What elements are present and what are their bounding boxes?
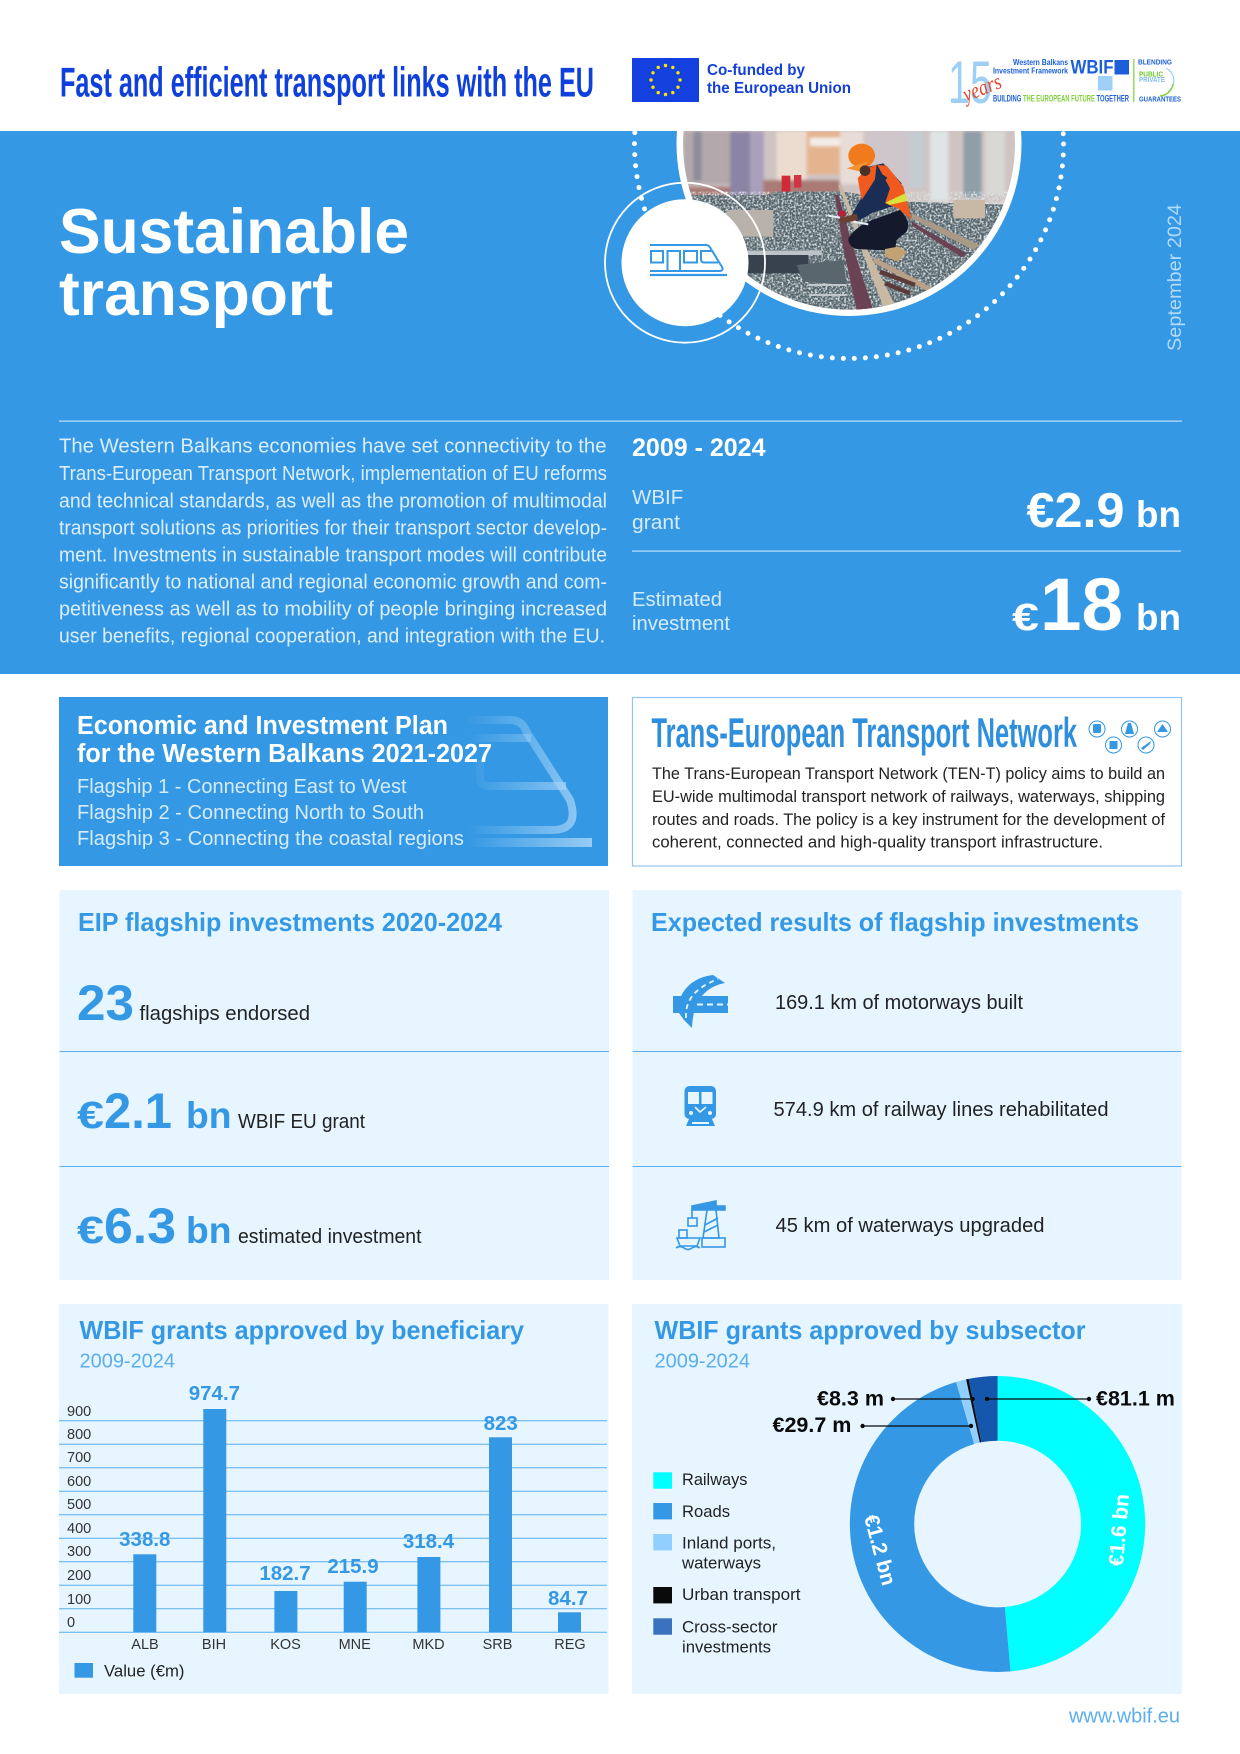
- bar chart: 215.9: [327, 1555, 379, 1578]
- legend: subsectors: investments: [682, 1637, 771, 1656]
- bar chart: 338.8: [119, 1528, 170, 1551]
- key figures 2009-2024: bn: [1136, 494, 1181, 535]
- bar chart: REG: [554, 1637, 586, 1653]
- intro paragraph: significantly to national and regional economic growth and com-: [59, 572, 607, 594]
- bar chart: 800: [67, 1427, 91, 1443]
- bar chart: ALB: [131, 1637, 159, 1653]
- rails: [835, 195, 873, 310]
- stat: WBIF EU grant: 2.1: [104, 1083, 172, 1139]
- hero title: transport: [59, 259, 333, 329]
- footer website: www.wbif.eu: [1068, 1706, 1180, 1728]
- legend: subsectors: waterways: [681, 1553, 761, 1572]
- panel: Economic and Investment Plan: Economic and Investment Plan: [77, 712, 448, 740]
- WBIF 15 years logo: years: [957, 68, 1005, 107]
- panel: Trans-European Transport Network: [632, 698, 1182, 866]
- key figures 2009-2024: Estimated: [632, 588, 722, 611]
- intro paragraph: Trans-European Transport Network, implementation of EU reforms: [59, 463, 607, 485]
- bar chart: 182.7: [259, 1562, 311, 1585]
- legend: subsectors: Cross-sector: [682, 1617, 778, 1636]
- WBIF 15 years logo: GUARANTEES: [1139, 96, 1181, 104]
- WBIF 15 years logo: PUBLIC: [1139, 72, 1163, 78]
- panel: EIP flagship investments: [60, 890, 609, 1280]
- key figures 2009-2024: bn: [1136, 597, 1181, 638]
- EU co-funding text: Co-funded by: [707, 62, 805, 79]
- panel: Economic and Investment Plan: Flagship 1 - Connecting East to West: [77, 776, 407, 798]
- legend: subsectors: Urban transport: [682, 1585, 801, 1604]
- donut chart: [850, 1376, 1145, 1672]
- stat: flagships endorsed: flagships endorsed: [140, 1003, 310, 1025]
- panel: EIP flagship investments: EIP flagship investments 2020-2024: [78, 907, 503, 937]
- stat: WBIF EU grant: WBIF EU grant: [238, 1111, 365, 1133]
- legend: subsectors: Railways: [682, 1470, 748, 1489]
- hero title: Sustainable: [59, 197, 409, 267]
- icon: train front: [684, 1086, 716, 1126]
- panel: Expected results: 45 km of waterways upgraded: [776, 1215, 1044, 1237]
- date label: September 2024: [1165, 204, 1186, 351]
- panel: Trans-European Transport Network: coherent, connected and high-quality transport infrastructure.: [652, 832, 1103, 852]
- panel: Economic and Investment Plan: [59, 697, 608, 866]
- panel: grants by subsector: WBIF grants approved by subsector: [654, 1315, 1086, 1345]
- panel: Trans-European Transport Network: The Trans-European Transport Network (TEN-T) policy aims to build an: [652, 764, 1165, 783]
- key figures 2009-2024: €2.9: [1026, 484, 1124, 538]
- key figures 2009-2024: investment: [632, 612, 730, 635]
- panel: Expected results: 169.1 km of motorways built: [775, 992, 1023, 1014]
- bar chart: 0: [67, 1615, 75, 1631]
- stat: WBIF EU grant: €: [77, 1095, 104, 1137]
- panel: Economic and Investment Plan: Flagship 2 - Connecting North to South: [77, 802, 424, 824]
- bar chart: 100: [67, 1592, 91, 1608]
- EU co-funding text: the European Union: [707, 80, 851, 97]
- intro paragraph: ment. Investments in sustainable transport modes will contribute: [59, 544, 607, 566]
- legend: subsectors: Roads: [682, 1502, 730, 1521]
- WBIF 15 years logo: BUILDING THE EUROPEAN FUTURE TOGETHER: [993, 94, 1129, 104]
- key figures 2009-2024: WBIF: [632, 486, 683, 509]
- bar chart: SRB: [483, 1637, 512, 1653]
- panel: Expected results: [632, 890, 1182, 1280]
- donut chart: €1.6 bn: [1105, 1493, 1134, 1567]
- intro paragraph: The Western Balkans economies have set connectivity to the: [59, 436, 606, 458]
- stat: estimated investment: [77, 1198, 422, 1254]
- key figures 2009-2024: €: [1012, 597, 1039, 639]
- panel: Trans-European Transport Network: EU-wide multimodal transport network of railways, waterways, shipping: [652, 787, 1165, 806]
- panel: grants by beneficiary: [59, 1304, 608, 1694]
- panel: grants by beneficiary: WBIF grants approved by beneficiary: [80, 1315, 525, 1345]
- intro paragraph: transport solutions as priorities for their transport sector develop-: [59, 518, 607, 540]
- panel: grants by beneficiary: 2009-2024: [80, 1350, 175, 1372]
- WBIF 15 years logo: 15: [948, 49, 992, 116]
- WBIF 15 years logo: WBIF: [1070, 58, 1114, 78]
- panel: Trans-European Transport Network: routes and roads. The policy is a key instrument for the development of: [652, 810, 1165, 829]
- icon: motorway interchange: [673, 975, 728, 1028]
- stat: flagships endorsed: [77, 975, 310, 1031]
- bar chart: 700: [67, 1450, 91, 1466]
- donut chart: €1.2 bn: [859, 1512, 900, 1588]
- panel: Economic and Investment Plan: for the Western Balkans 2021-2027: [77, 740, 492, 768]
- WBIF 15 years logo: PRIVATE: [1139, 77, 1165, 84]
- bar chart: 600: [67, 1474, 91, 1490]
- hero title: [59, 197, 409, 329]
- WBIF 15 years logo: Western Balkans: [1013, 58, 1068, 67]
- bar chart: 500: [67, 1497, 91, 1513]
- intro paragraph: and technical standards, as well as the promotion of multimodal: [59, 490, 607, 512]
- legend: value: Value (€m): [104, 1662, 184, 1680]
- callouts: €8.3 m: [817, 1386, 884, 1410]
- intro paragraph: [59, 436, 607, 648]
- WBIF 15 years logo: [948, 49, 1181, 116]
- worker: [852, 163, 902, 222]
- legend: subsectors: [653, 1470, 801, 1656]
- bar chart: 200: [67, 1568, 91, 1584]
- divider: hero: [59, 420, 1182, 422]
- bar chart: 974.7: [189, 1382, 240, 1405]
- intro paragraph: user benefits, regional cooperation, and integration with the EU.: [59, 626, 605, 648]
- EU flag logo: [632, 58, 699, 102]
- bar chart: 900: [67, 1404, 91, 1420]
- intro paragraph: petitiveness as well as to mobility of people bringing increased: [59, 598, 607, 620]
- header title: Fast and efficient transport links with the EU: [60, 58, 594, 106]
- bar chart: 318.4: [403, 1530, 455, 1553]
- stat: estimated investment: estimated investment: [238, 1226, 422, 1248]
- EU co-funding text: [707, 62, 851, 97]
- bar chart: KOS: [270, 1637, 301, 1653]
- stat: estimated investment: bn: [186, 1210, 232, 1251]
- panel: grants by subsector: 2009-2024: [654, 1350, 750, 1372]
- key figures 2009-2024: grant: [632, 511, 680, 534]
- bar chart: BIH: [202, 1637, 226, 1653]
- photo: rail worker inspecting tracks: [677, 125, 1023, 315]
- WBIF 15 years logo: BLENDING: [1138, 60, 1173, 66]
- bar chart: MKD: [412, 1637, 445, 1653]
- icons: transport modes: [1089, 721, 1170, 753]
- callouts: €29.7 m: [772, 1413, 851, 1437]
- train outline watermark: [467, 720, 576, 831]
- panel: Expected results: Expected results of flagship investments: [651, 907, 1139, 937]
- stat: WBIF EU grant: [77, 1083, 365, 1139]
- bar chart: MNE: [339, 1637, 371, 1653]
- hero blue band: [0, 131, 1240, 674]
- icon: port crane and ship: [676, 1201, 725, 1250]
- bar chart: 400: [67, 1521, 91, 1537]
- key figures 2009-2024: 18: [1040, 563, 1123, 646]
- hero graphic: dotted circle, rail worker photo and train badge: [604, 131, 1066, 361]
- bar chart: 300: [67, 1544, 91, 1560]
- callouts: [772, 1386, 1175, 1437]
- WBIF 15 years logo: Investment Framework: [993, 66, 1068, 76]
- bar chart: [59, 1382, 607, 1653]
- stat: estimated investment: €: [77, 1210, 104, 1252]
- stat: flagships endorsed: 23: [77, 975, 134, 1031]
- callouts: €81.1 m: [1096, 1386, 1175, 1410]
- bar chart: 823: [484, 1412, 518, 1435]
- key figures 2009-2024: 2009 - 2024: [632, 434, 766, 462]
- legend: subsectors: Inland ports,: [682, 1533, 776, 1552]
- panel: grants by subsector: [632, 1304, 1182, 1694]
- stat: WBIF EU grant: bn: [186, 1095, 232, 1136]
- bar chart: 84.7: [548, 1587, 588, 1610]
- key figures 2009-2024: [632, 434, 1181, 646]
- stat: estimated investment: 6.3: [104, 1198, 176, 1254]
- panel: Economic and Investment Plan: Flagship 3 - Connecting the coastal regions: [77, 828, 464, 850]
- panel: Expected results: 574.9 km of railway lines rehabilitated: [774, 1099, 1108, 1121]
- icon: tram badge: [650, 245, 727, 275]
